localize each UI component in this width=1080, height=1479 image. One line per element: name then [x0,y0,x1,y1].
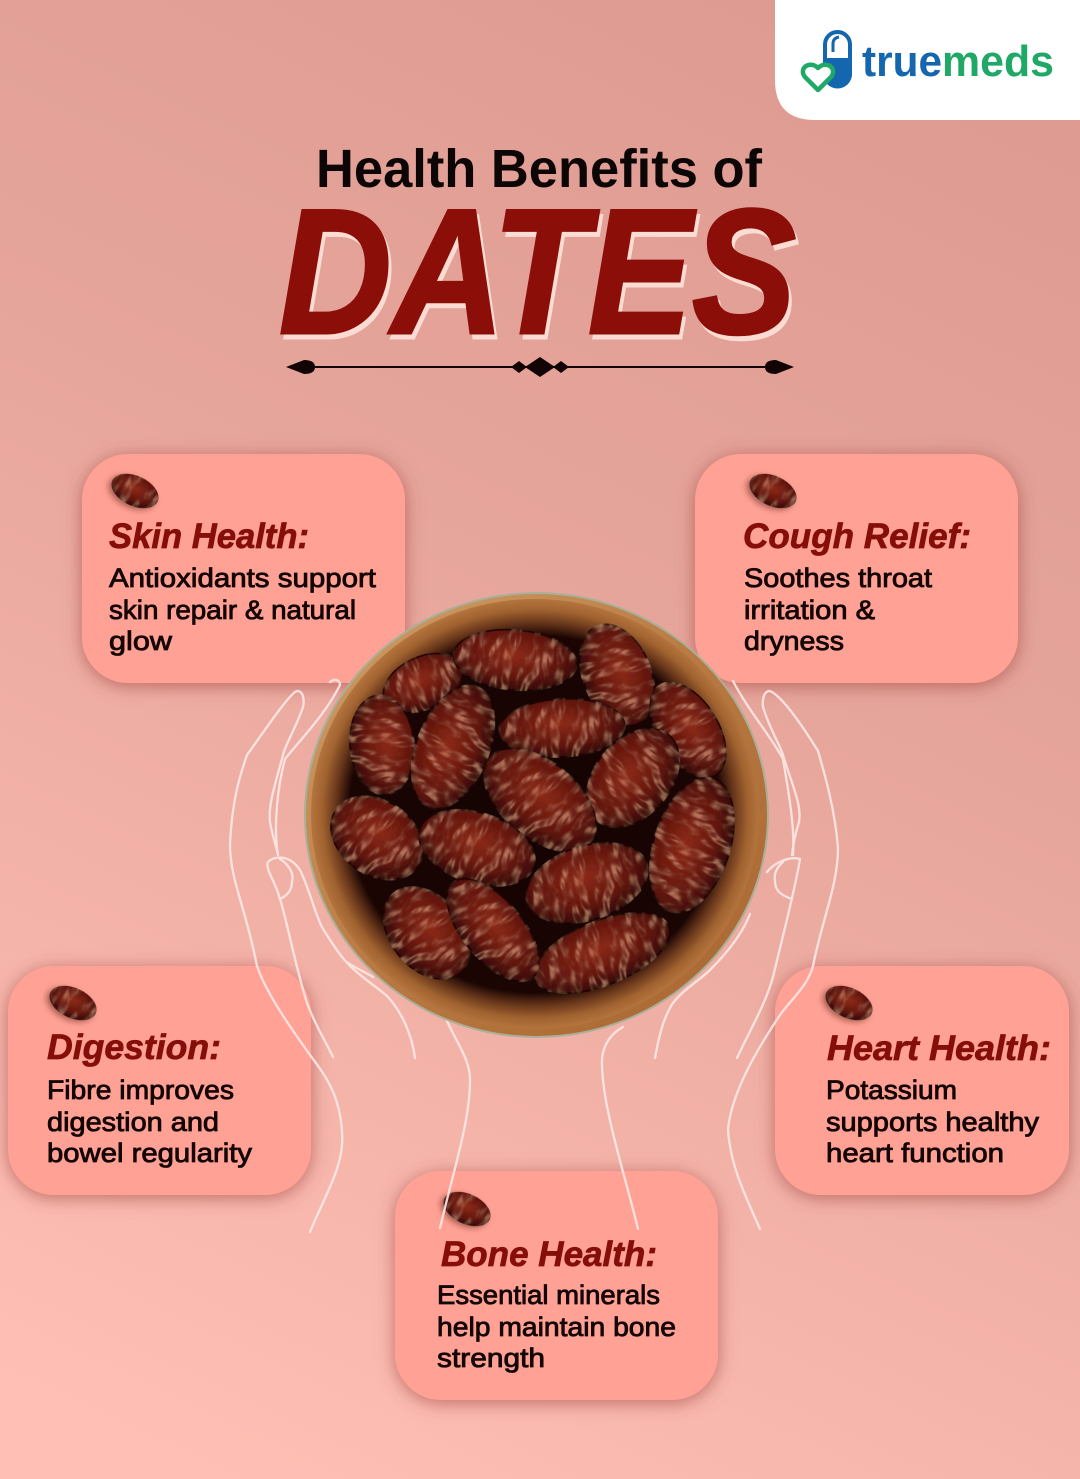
bowl of dates [304,592,769,1038]
icon: date [44,979,102,1027]
line-art hands [230,680,838,1232]
card: Skin Health [82,454,405,683]
heading: Skin Health: [109,517,309,556]
body text [437,1280,676,1373]
heading: Cough Relief: [743,517,971,556]
body text [826,1075,1040,1168]
body text: Essential minerals [437,1280,660,1310]
body text: Potassium [826,1075,957,1105]
logo wordmark: meds [942,37,1054,86]
logo panel: truemeds [775,0,1080,120]
title: DATES: DATES [279,172,796,371]
body text: help maintain bone [437,1312,676,1342]
body text: dryness [744,626,844,656]
ornamental divider [286,357,794,377]
body text: Antioxidants support [109,563,377,593]
body text: skin repair & natural [109,595,356,625]
icon: date [744,467,802,515]
icon: date [106,467,164,515]
card: Cough Relief [695,454,1018,683]
body text [47,1075,253,1168]
body text: irritation & [744,595,875,625]
body text: bowel regularity [47,1138,253,1168]
dates [315,613,750,1010]
card: Heart Health [775,966,1069,1195]
heading: Bone Health: [441,1235,657,1274]
icon: date [438,1185,496,1233]
title: Health Benefits of: Health Benefits of [316,139,763,199]
heading: Digestion: [47,1028,221,1067]
body text: heart function [826,1138,1004,1168]
bowl [304,592,769,1038]
icon: heart [803,65,833,90]
body text: strength [437,1343,545,1373]
title: DATES: DATES [282,177,799,376]
body text: Fibre improves [47,1075,234,1105]
body text [744,563,933,656]
body text: supports healthy [826,1107,1040,1137]
icon: date [820,979,878,1027]
logo wordmark: true [862,37,942,86]
body text [109,563,377,656]
body text: digestion and [47,1107,219,1137]
body text: Soothes throat [744,563,933,593]
card: Bone Health [395,1171,718,1400]
card: Digestion [8,966,311,1195]
heading: Heart Health: [827,1029,1051,1068]
icon: capsule [823,32,852,88]
body text: glow [109,626,173,656]
